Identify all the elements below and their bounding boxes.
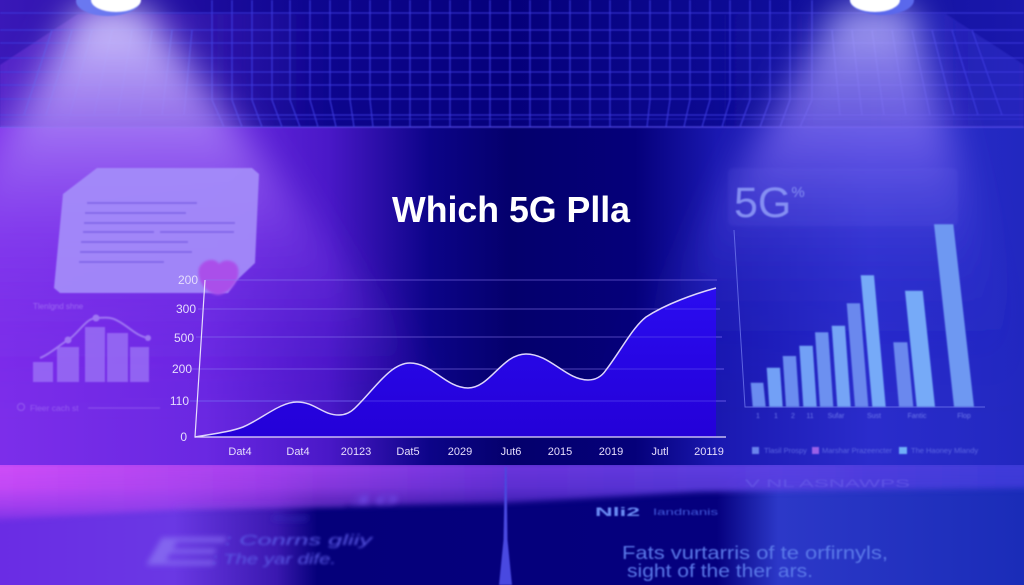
5G panel backing xyxy=(728,168,958,226)
blurred floor text right xyxy=(595,478,910,581)
spotlight beam left xyxy=(0,6,450,400)
5G x labels: 1 xyxy=(774,413,778,420)
floor right copy second line: sight of the ther ars. xyxy=(627,561,813,581)
5G legend: Tlasil Prospy xyxy=(764,446,807,455)
floor right copy: Fats vurtarris of te orfirnyls, xyxy=(622,543,888,563)
floor centre line xyxy=(499,467,512,585)
5G x labels: 11 xyxy=(806,413,814,420)
icon: heart blob xyxy=(199,260,238,295)
floor top-right caption: V NL ASNAWPS xyxy=(745,478,910,490)
floor glowing band xyxy=(0,462,1024,522)
floor left copy second line: : The yar dife. xyxy=(212,551,336,568)
y-axis labels: 200 xyxy=(172,362,192,376)
y-axis labels: 500 xyxy=(174,331,194,345)
x-axis labels: 20123 xyxy=(341,446,371,458)
floor small caption: Afiscuand xyxy=(271,514,308,523)
perspective grid xyxy=(0,0,1024,127)
5G axes xyxy=(734,230,985,407)
y-axis labels: 300 xyxy=(176,302,196,316)
y-axis labels: 200 xyxy=(178,273,198,287)
5G x labels: Flop xyxy=(957,413,971,420)
small chart caption: Fleer cach st xyxy=(30,403,79,413)
area line xyxy=(195,288,716,437)
y-axis labels: 0 xyxy=(180,430,187,444)
title: Which 5G Plla xyxy=(392,189,631,230)
floor left copy: : Conrns gliiy xyxy=(225,532,375,549)
upper-left wall wedge xyxy=(0,14,330,127)
x-axis labels: 2029 xyxy=(448,446,472,458)
5G x labels: 2 xyxy=(791,413,795,420)
upper-right wall wedge xyxy=(700,14,1024,127)
5G legend: The Haoney Mlandy xyxy=(911,446,978,455)
lamp left xyxy=(76,0,141,16)
small chart title: Tlenlgnd shne xyxy=(33,302,84,311)
gridlines over area xyxy=(190,309,726,401)
small chart line xyxy=(40,314,151,358)
x-axis labels: Dat5 xyxy=(396,446,420,458)
5G legend: Marshar Prazeencter xyxy=(822,446,893,455)
spotlight beam right xyxy=(600,6,1024,400)
panel: 5G bar chart xyxy=(728,168,985,455)
5G heading: % xyxy=(791,184,805,201)
x-axis labels: Dat4 xyxy=(228,446,252,458)
floor right heading: Nli2 xyxy=(595,505,641,519)
y-axis labels xyxy=(170,273,198,444)
chart axes xyxy=(195,280,726,437)
x-axis labels: Jut6 xyxy=(501,446,521,458)
floor right sub heading: Iandnanis xyxy=(653,507,719,517)
blurred floor text left xyxy=(144,493,399,574)
floor large letter: E xyxy=(144,530,228,574)
upper wall xyxy=(0,0,1024,127)
x-axis labels: 2019 xyxy=(599,446,623,458)
x-axis labels: 2015 xyxy=(548,446,572,458)
x-axis labels: 20119 xyxy=(694,446,724,458)
area fill xyxy=(195,288,716,437)
5G x labels: Sufar xyxy=(828,413,845,420)
main area chart xyxy=(170,273,726,458)
document text lines xyxy=(79,203,235,262)
5G x labels: Fantic xyxy=(907,413,927,420)
floor rule and number: 10 xyxy=(350,493,399,507)
x-axis labels: Jutl xyxy=(651,446,669,458)
small chart caption xyxy=(18,403,160,413)
5G heading: 5G xyxy=(734,179,791,227)
floor lower section xyxy=(0,465,1024,585)
x-axis labels: Dat4 xyxy=(286,446,310,458)
small chart bars xyxy=(33,327,149,382)
panel: document card xyxy=(54,168,259,293)
x-axis labels xyxy=(228,446,724,458)
5G legend xyxy=(752,446,978,455)
chart gridlines xyxy=(190,280,726,401)
5G x labels xyxy=(756,413,971,420)
5G bars xyxy=(751,224,974,407)
lamp right xyxy=(850,0,914,15)
y-axis labels: 110 xyxy=(170,394,189,408)
5G x labels: Sust xyxy=(867,413,881,420)
5G x labels: 1 xyxy=(756,413,760,420)
panel: small combo chart xyxy=(18,302,160,413)
